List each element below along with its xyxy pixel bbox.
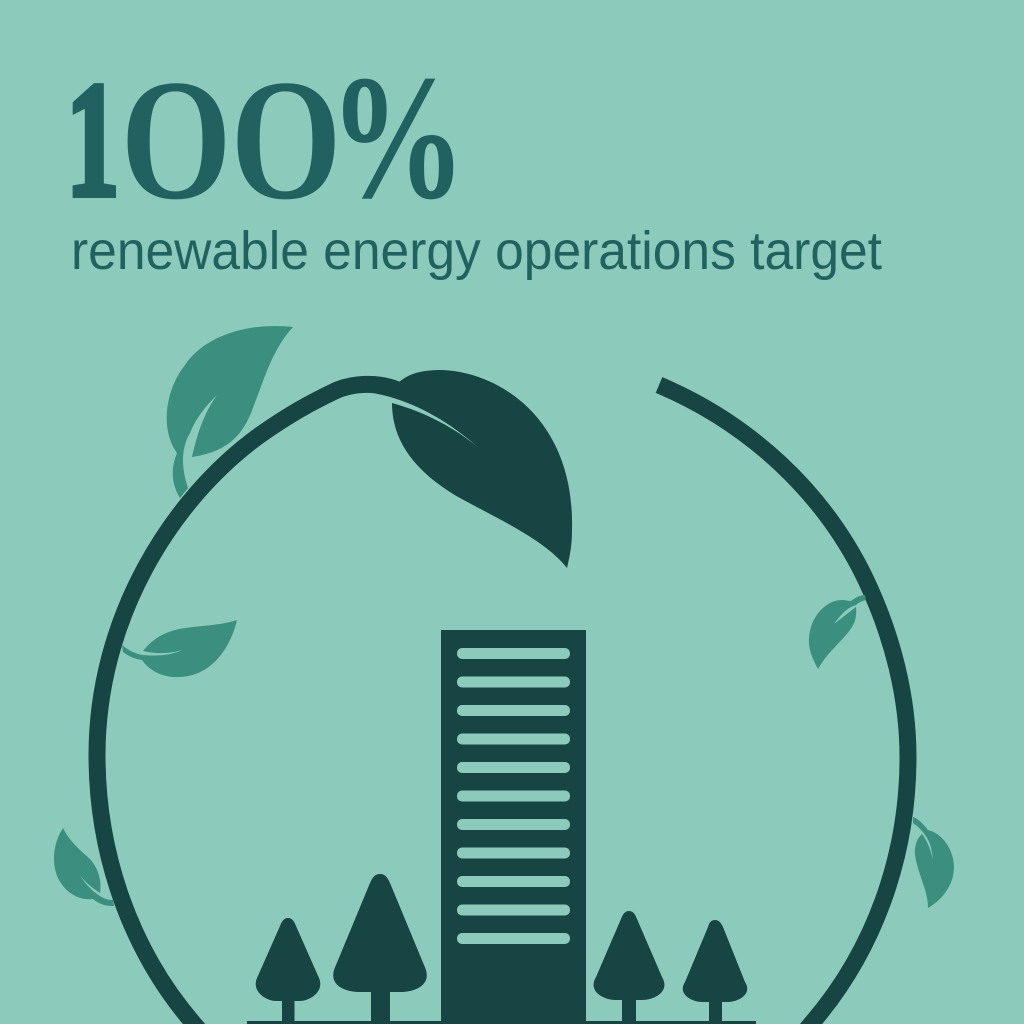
title: 100%: % [329,39,466,236]
tree 2 [333,874,427,1022]
ground line [247,1021,756,1024]
tree 1 [256,918,320,1022]
leaf: top left [167,326,293,498]
leaf: right lower [913,817,954,908]
building [441,630,586,1024]
leaf: right upper [809,595,866,669]
leaf: bottom left [54,828,114,906]
title: 100% [66,39,466,236]
title: 100%: 1 [66,49,120,232]
ring: left arc with stem [97,384,402,1024]
subtitle: renewable energy operations target [71,221,882,281]
leaf: left middle [122,620,237,677]
title: 100%: 00 [120,47,342,235]
building windows [457,648,570,944]
tree 4 [683,920,747,1022]
large leaf [367,370,572,568]
tree 3 [594,911,664,1022]
ring: right arc [659,385,908,1024]
